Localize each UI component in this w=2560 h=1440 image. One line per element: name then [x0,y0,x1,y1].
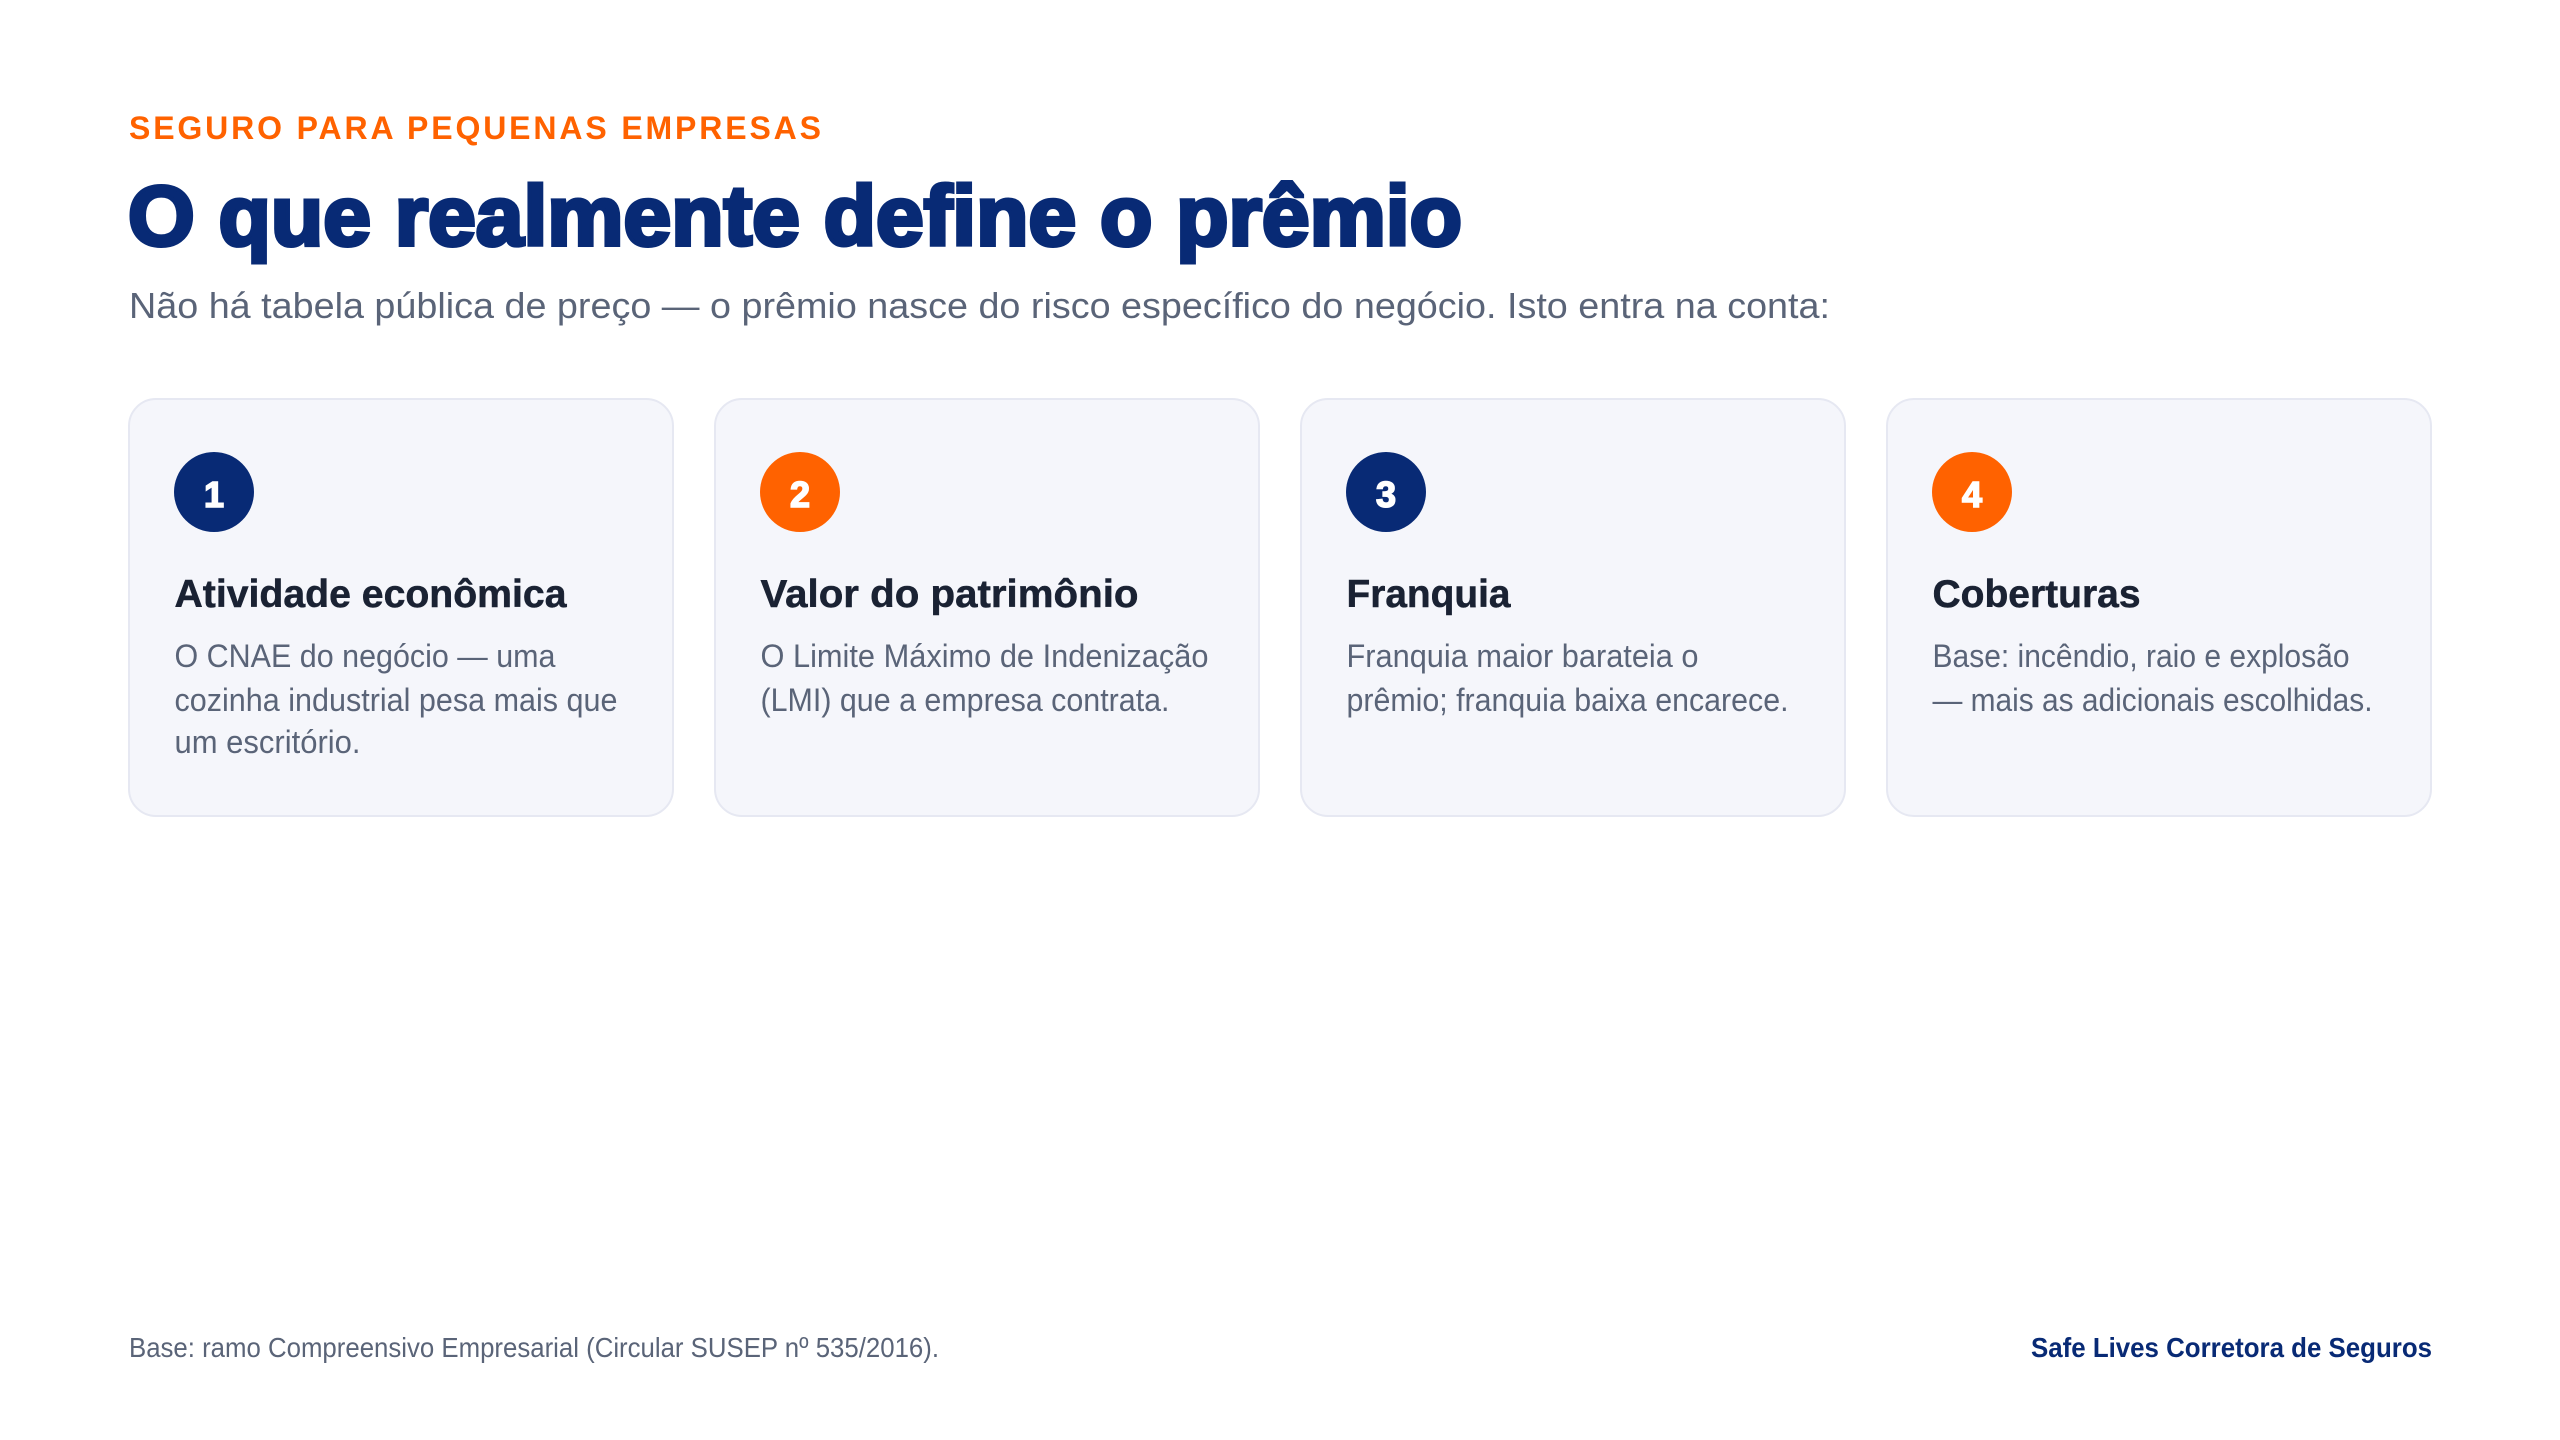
footer source note: Base: ramo Compreensivo Empresarial (Circular SUSEP nº 535/2016). [129,1332,939,1363]
icon: number 3: 3 [1376,474,1396,515]
card text 4: — mais as adicionais escolhidas. [1932,682,2372,718]
card text 4 [1932,638,2372,718]
icon: number 4 [1932,452,2012,532]
header [128,110,1830,326]
icon: number 2 [760,452,840,532]
card text 2: (LMI) que a empresa contrata. [760,682,1170,718]
card heading 4: Coberturas [1932,573,2140,616]
card text 2: O Limite Máximo de Indenização [760,638,1208,674]
icon: number 4: 4 [1962,474,1982,515]
icon: number 1 [174,452,254,532]
icon: number 2: 2 [790,474,810,515]
card text 1: um escritório. [174,724,360,760]
card text 4: Base: incêndio, raio e explosão [1932,638,2350,674]
card text 3: Franquia maior barateia o [1346,638,1698,674]
panel: coberturas [1887,399,2431,816]
card text 3 [1346,638,1788,718]
panel: valor do patrimônio [715,399,1259,816]
card text 1: O CNAE do negócio — uma [174,638,556,674]
panel: franquia [1301,399,1845,816]
card heading 3: Franquia [1346,573,1511,616]
title: O que realmente define o prêmio [128,169,1462,263]
card heading 2: Valor do patrimônio [760,573,1138,616]
icon: number 1: 1 [204,474,224,515]
panel: atividade econômica [129,399,673,816]
icon: number 3 [1346,452,1426,532]
eyebrow: SEGURO PARA PEQUENAS EMPRESAS [129,110,821,146]
card text 1 [174,638,618,760]
card text 1: cozinha industrial pesa mais que [174,682,618,718]
card text 2 [760,638,1208,718]
subtitle: Não há tabela pública de preço — o prêmio nasce do risco específico do negócio. Isto entra na conta: [129,285,1830,326]
card heading 1: Atividade econômica [174,573,567,616]
card text 3: prêmio; franquia baixa encarece. [1346,682,1788,718]
footer brand: Safe Lives Corretora de Seguros [2031,1332,2432,1363]
